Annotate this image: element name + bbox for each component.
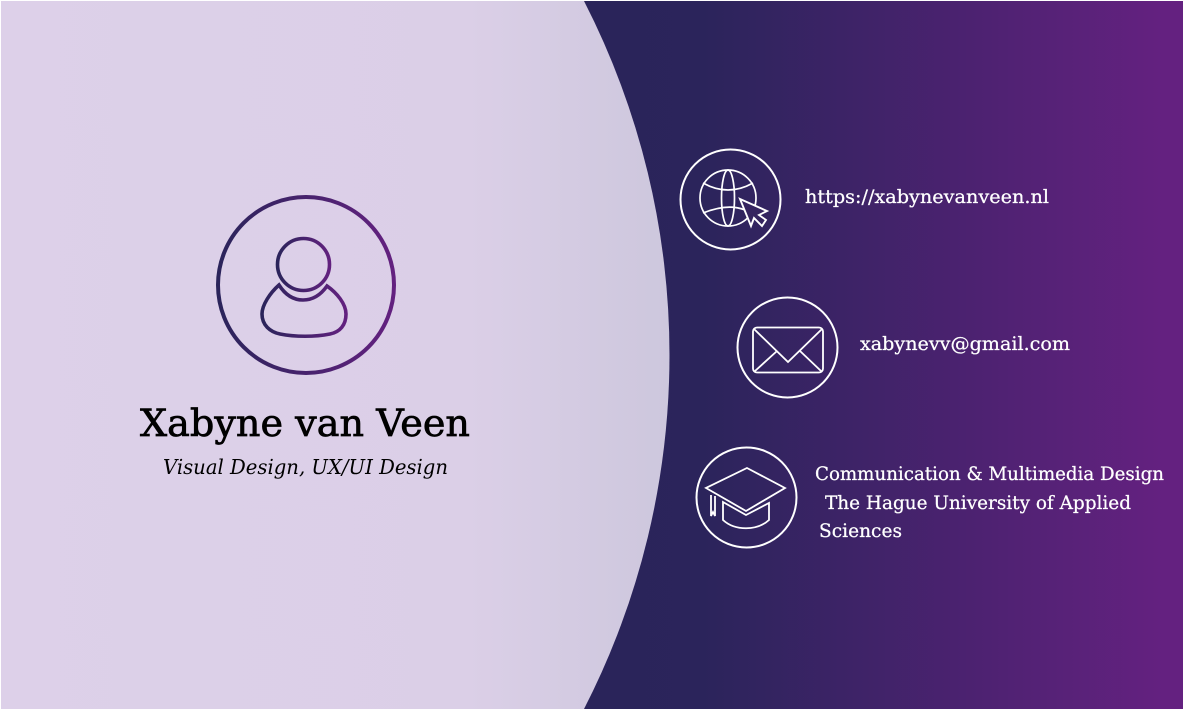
text: website: https://xabynevanveen.nl xyxy=(805,186,1049,208)
icon: globe with cursor xyxy=(680,150,780,250)
panel: light curved profile area xyxy=(1,1,669,709)
heading: name: Xabyne van Veen xyxy=(140,402,470,445)
icon: graduation cap xyxy=(696,448,796,548)
icon: person avatar xyxy=(218,197,394,373)
text: study programme: Communication & Multimedia Design xyxy=(815,463,1164,485)
text: university continued: Sciences xyxy=(819,520,902,542)
icon: envelope xyxy=(738,298,838,398)
text: education xyxy=(815,463,1164,542)
text: role: Visual Design, UX/UI Design xyxy=(163,455,448,479)
text: university: The Hague University of Applied xyxy=(825,492,1131,514)
text: email: xabynevv@gmail.com xyxy=(860,333,1070,355)
